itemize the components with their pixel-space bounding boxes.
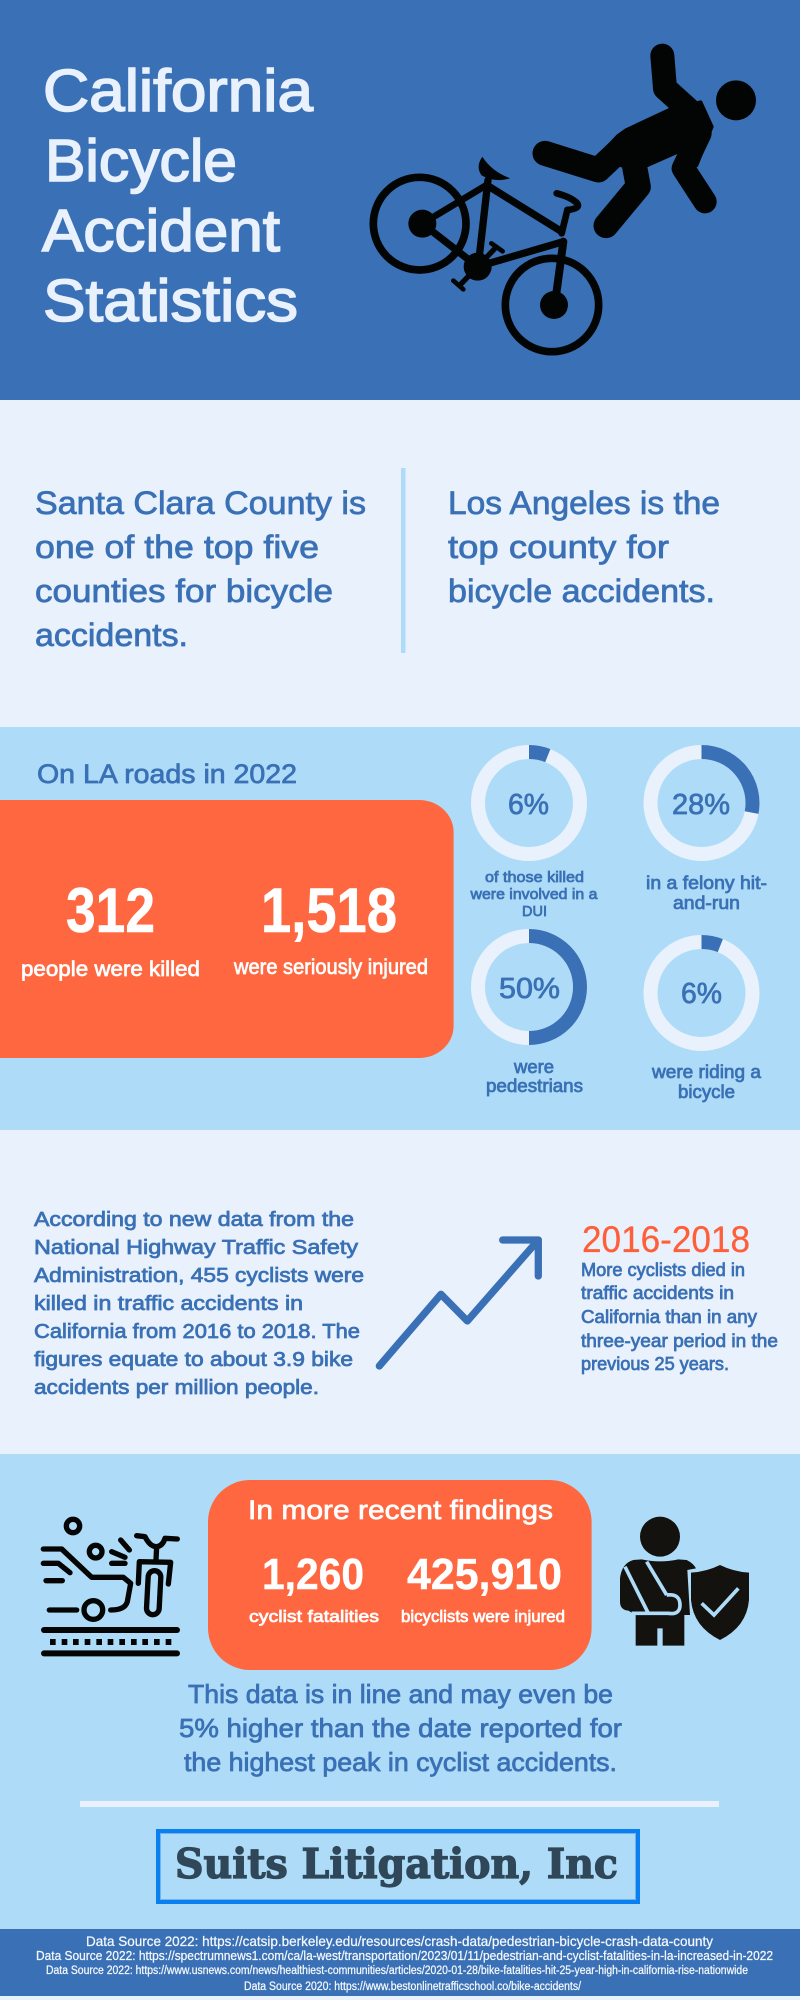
text: Santa Clara County	[35, 485, 366, 653]
text: more cyclists died: traffic accidents in	[581, 1283, 734, 1303]
text: Los Angeles	[448, 485, 720, 609]
text: data in line	[179, 1679, 622, 1777]
card: recent findings	[208, 1480, 592, 1670]
text: NHTSA paragraph: accidents per million people.	[34, 1377, 319, 1399]
panel: county facts	[35, 468, 720, 653]
card: recent findings: In more recent findings	[248, 1495, 553, 1525]
text: more cyclists died	[581, 1260, 778, 1374]
panel: NHTSA data	[34, 1209, 778, 1399]
panel: footer data sources: Data Source 2022: https://catsip.berkeley.edu/resources/crash-data/pedestrian-bicycle-crash-data-county	[86, 1933, 713, 1949]
chart: 50% pedestrians donut: 50%	[499, 973, 560, 1005]
icon: injured person with shield	[620, 1517, 749, 1646]
panel: footer data sources: Data Source 2022: https://www.usnews.com/news/healthiest-communities/articles/2020-01-28/bike-fatalities-hit-25-year-high-in-california-rise-nationwide	[46, 1965, 748, 1977]
card: recent findings: 1,260	[262, 1550, 364, 1599]
text: Santa Clara County: counties for bicycle	[35, 573, 333, 609]
card: killed and injured: 1,518	[261, 876, 397, 946]
text: Santa Clara County: Santa Clara County is	[35, 485, 366, 521]
text: NHTSA paragraph: figures equate to about 3.9 bike	[34, 1349, 353, 1371]
icon: cyclist falling off bicycle	[373, 56, 756, 352]
arrow: rising trend	[379, 1240, 538, 1366]
icon: car hitting cyclist	[43, 1519, 177, 1653]
chart: 28% felony hit-and-run donut: in a felony hit-	[646, 873, 767, 893]
title: Bicycle	[45, 128, 237, 194]
text: more cyclists died: three-year period in the	[581, 1331, 778, 1351]
chart: 50% pedestrians donut: pedestrians	[486, 1076, 583, 1096]
chart: 6% DUI donut: DUI	[522, 903, 547, 920]
card: recent findings: cyclist fatalities	[249, 1607, 379, 1626]
text: Santa Clara County: one of the top five	[35, 529, 319, 565]
heading: On LA roads in 2022: On LA roads in 2022	[37, 759, 297, 789]
title	[42, 58, 313, 334]
text: data in line: This data is in line and may even be	[188, 1679, 613, 1709]
text: more cyclists died: More cyclists died in	[581, 1260, 745, 1280]
chart: 28% felony hit-and-run donut: 28%	[672, 789, 730, 821]
panel: LA roads 2022	[0, 727, 800, 1130]
chart: 6% riding a bicycle donut: were riding a	[651, 1062, 762, 1082]
title: Accident	[42, 198, 280, 264]
logo: Suits Litigation, Inc	[158, 1831, 638, 1902]
chart: 50% pedestrians donut: were	[513, 1057, 554, 1077]
text: NHTSA paragraph: California from 2016 to 2018. The	[34, 1321, 360, 1343]
text: Los Angeles: bicycle accidents.	[448, 573, 715, 609]
title: California	[43, 58, 313, 124]
chart: 6% riding a bicycle donut: bicycle	[678, 1082, 735, 1102]
chart: 6% riding a bicycle donut: 6%	[681, 978, 722, 1010]
heading: 2016-2018: 2016-2018	[582, 1219, 750, 1260]
text: NHTSA paragraph: killed in traffic accidents in	[34, 1293, 303, 1315]
chart: 6% riding a bicycle donut	[650, 942, 762, 1102]
card: killed and injured: were seriously injured	[233, 956, 428, 979]
text: Santa Clara County: accidents.	[35, 617, 188, 653]
card: killed and injured: 312	[66, 876, 155, 946]
text: Los Angeles: top county for	[448, 529, 669, 565]
chart: 6% DUI donut: of those killed	[485, 869, 584, 886]
text: NHTSA paragraph: Administration, 455 cyclists were	[34, 1265, 364, 1287]
panel: recent findings	[0, 1454, 800, 1930]
panel: footer data sources	[0, 1929, 800, 1996]
text: NHTSA paragraph	[34, 1209, 364, 1399]
chart: 6% DUI donut: were involved in a	[469, 886, 598, 903]
chart: 50% pedestrians donut	[478, 936, 583, 1096]
chart: 6% DUI donut: 6%	[508, 789, 549, 821]
card: recent findings: 425,910	[407, 1550, 562, 1599]
text: NHTSA paragraph: National Highway Traffic Safety	[34, 1237, 358, 1259]
chart: 28% felony hit-and-run donut: and-run	[673, 893, 740, 913]
panel: footer data sources: Data Source 2020: https://www.bestonlinetrafficschool.co/bike-accidents/	[244, 1981, 582, 1993]
text: more cyclists died: California than in any	[581, 1307, 757, 1327]
title: Statistics	[43, 268, 298, 334]
chart: 28% felony hit-and-run donut	[646, 752, 767, 913]
card: killed and injured: people were killed	[21, 958, 200, 981]
logo: Suits Litigation, Inc: Suits Litigation, Inc	[175, 1840, 618, 1888]
text: more cyclists died: previous 25 years.	[581, 1354, 729, 1374]
chart: 6% DUI donut	[469, 752, 598, 920]
text: NHTSA paragraph: According to new data from the	[34, 1209, 354, 1231]
text: data in line: 5% higher than the date reported for	[179, 1713, 622, 1743]
card: killed and injured	[0, 800, 454, 1058]
text: data in line: the highest peak in cyclist accidents.	[184, 1747, 617, 1777]
panel: header	[0, 0, 800, 400]
card: recent findings: bicyclists were injured	[401, 1607, 565, 1626]
text: Los Angeles: Los Angeles is the	[448, 485, 720, 521]
